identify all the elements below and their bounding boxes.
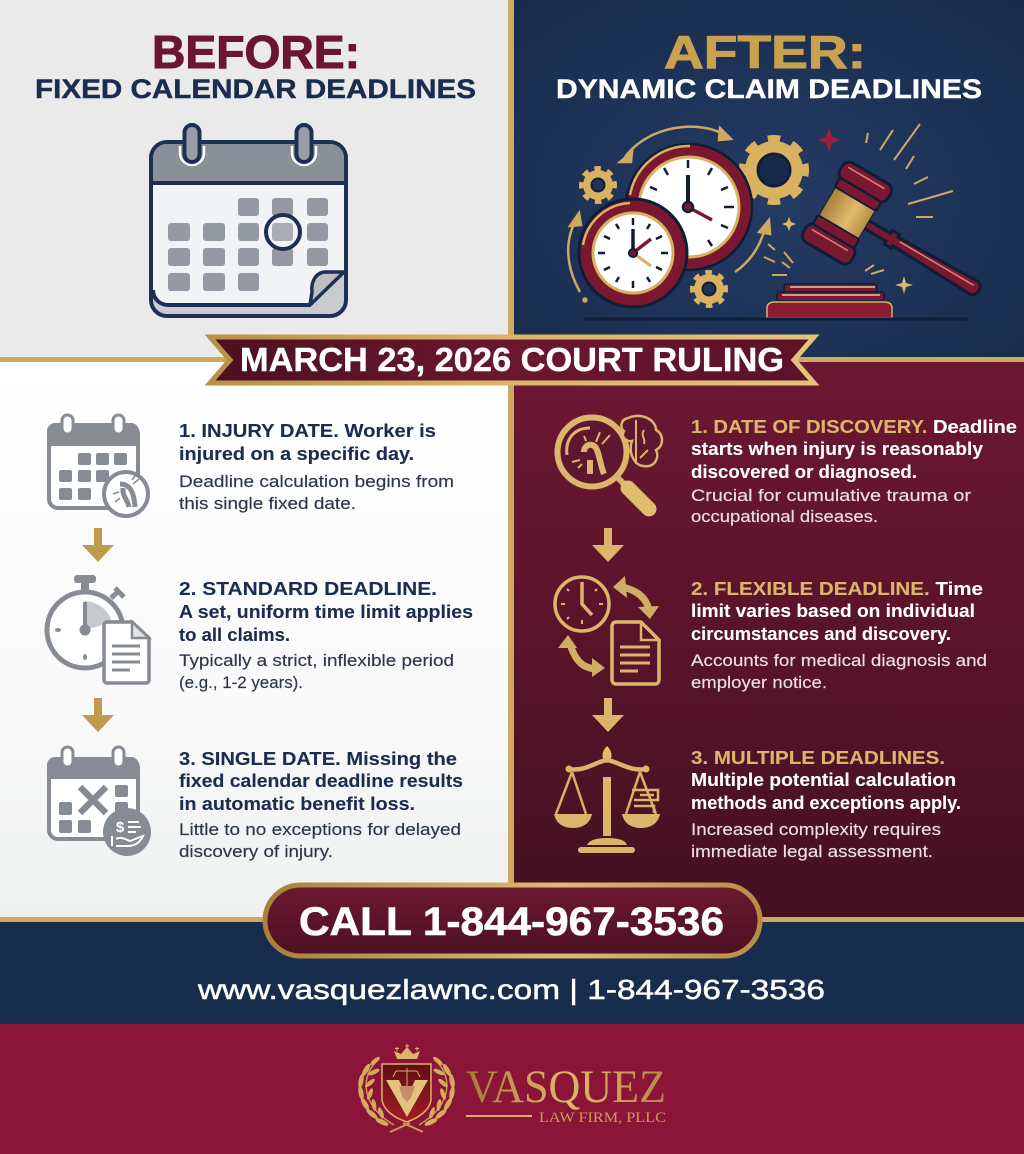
- panel: after steps: [554, 416, 1017, 861]
- icon: small gear left: [582, 168, 614, 202]
- arrow: step 1 to 2: [592, 528, 624, 562]
- website and phone line: www.vasquezlawnc.com | 1-844-967-3536: [197, 974, 825, 1005]
- illustration: gavel: [584, 124, 1002, 330]
- icon: stopwatch with document: [47, 575, 149, 683]
- step 1 text: injury date: injured on a specific day.: [179, 443, 414, 464]
- step 2 text: flexible deadline: Accounts for medical diagnosis and: [691, 652, 987, 670]
- before heading: FIXED CALENDAR DEADLINES: [35, 74, 476, 104]
- step 2 text: standard deadline: Typically a strict, inflexible period: [179, 652, 454, 670]
- phone call text: CALL 1-844-967-3536: [299, 900, 724, 944]
- step 3 text: multiple deadlines: methods and exceptions apply.: [691, 792, 961, 813]
- panel: after steps background: [512, 360, 1024, 920]
- gavel spark lines: [764, 124, 953, 275]
- step 2 text: flexible deadline: limit varies based on individual: [691, 600, 975, 621]
- step 1 text: date of discovery: discovered or diagnosed.: [691, 461, 917, 482]
- logo wordmark: VASQUEZ: [466, 1061, 666, 1113]
- panel: after header background: [512, 0, 1024, 360]
- step 2 text: flexible deadline: circumstances and discovery.: [691, 623, 951, 644]
- banner: court ruling ribbon: [210, 337, 814, 383]
- step 1 text: date of discovery: [691, 416, 1017, 526]
- sparkle stars: [782, 128, 913, 294]
- crest laurel wreath left: [357, 1055, 394, 1127]
- step 3 text: multiple deadlines: 3. MULTIPLE DEADLINES.: [691, 747, 945, 768]
- illustration: clocks and gears: [568, 127, 805, 307]
- step 3 text: single date: in automatic benefit loss.: [179, 793, 415, 814]
- step 3 text: multiple deadlines: Increased complexity requires: [691, 821, 941, 839]
- step 1 text: date of discovery: occupational diseases.: [691, 508, 878, 526]
- after heading: AFTER:: [664, 26, 866, 78]
- step 1 text: injury date: this single fixed date.: [179, 495, 356, 513]
- after heading: DYNAMIC CLAIM DEADLINES: [556, 74, 982, 104]
- icon: clock, document and cycle arrows: [555, 576, 659, 684]
- icon: calendar with injury badge: [47, 415, 148, 516]
- icon: calendar with X and money badge: [47, 747, 151, 856]
- step 3 text: single date: discovery of injury.: [179, 843, 333, 861]
- icon: gavel head and handle: [800, 159, 1002, 330]
- step 3 text: single date: 3. SINGLE DATE. Missing the: [179, 748, 457, 769]
- step 3 text: multiple deadlines: [691, 747, 961, 861]
- arrows around clocks: [568, 127, 770, 301]
- logo: Vasquez Law Firm: LAW FIRM, PLLC: [539, 1110, 666, 1126]
- icon: scales of justice: [554, 746, 660, 853]
- step 3 text: single date: [179, 748, 463, 861]
- icon: gavel sound block: [767, 284, 892, 318]
- step 1 text: date of discovery: 1. DATE OF DISCOVERY. Deadline: [691, 416, 1017, 437]
- panel: before steps background: [0, 360, 510, 920]
- step 1 text: date of discovery: Crucial for cumulative trauma or: [691, 487, 972, 505]
- icon: calendar with X and money badge: $: [116, 819, 125, 836]
- panel: before header background: [0, 0, 510, 360]
- step 2 text: flexible deadline: 2. FLEXIBLE DEADLINE. Time: [691, 578, 983, 599]
- step 2 text: standard deadline: to all claims.: [179, 624, 290, 645]
- arrow: step 2 to 3: [592, 698, 624, 732]
- crest crown: [394, 1044, 420, 1059]
- step 2 text: standard deadline: [179, 578, 473, 692]
- before heading: BEFORE:: [152, 26, 360, 78]
- step 3 text: multiple deadlines: immediate legal assessment.: [691, 843, 933, 861]
- arrow: step 2 to 3: [82, 698, 114, 732]
- panel: contact band: [0, 921, 1024, 1024]
- step 1 text: injury date: 1. INJURY DATE. Worker is: [179, 420, 436, 441]
- icon: magnifier with injury and brain: [558, 416, 662, 509]
- logo: Vasquez Law Firm: [357, 1044, 666, 1132]
- arrow: step 1 to 2: [82, 528, 114, 562]
- panel: before steps: [47, 415, 473, 861]
- icon: small clock: [579, 199, 687, 307]
- crest laurel wreath right: [419, 1055, 456, 1127]
- icon: large clock: [626, 144, 752, 270]
- after heading: [556, 26, 982, 104]
- before heading: [35, 26, 476, 104]
- icon: fixed calendar: [151, 125, 346, 316]
- step 3 text: multiple deadlines: Multiple potential calculation: [691, 769, 956, 790]
- step 2 text: standard deadline: 2. STANDARD DEADLINE.: [179, 578, 437, 599]
- step 2 text: flexible deadline: employer notice.: [691, 674, 827, 692]
- step 2 text: standard deadline: (e.g., 1-2 years).: [179, 674, 303, 692]
- step 1 text: date of discovery: starts when injury is reasonably: [691, 438, 984, 459]
- call to action pill: [265, 885, 760, 956]
- icon: small gear bottom: [692, 272, 726, 306]
- panel: footer band: [0, 1024, 1024, 1154]
- step 1 text: injury date: [179, 420, 454, 513]
- step 3 text: single date: Little to no exceptions for delayed: [179, 821, 461, 839]
- icon: large gear: [743, 139, 805, 201]
- crest shield: [382, 1064, 431, 1122]
- step 3 text: single date: fixed calendar deadline results: [179, 770, 463, 791]
- step 1 text: injury date: Deadline calculation begins from: [179, 473, 454, 491]
- banner title: MARCH 23, 2026 COURT RULING: [240, 341, 784, 378]
- step 2 text: standard deadline: A set, uniform time limit applies: [179, 601, 473, 622]
- step 2 text: flexible deadline: [691, 578, 987, 692]
